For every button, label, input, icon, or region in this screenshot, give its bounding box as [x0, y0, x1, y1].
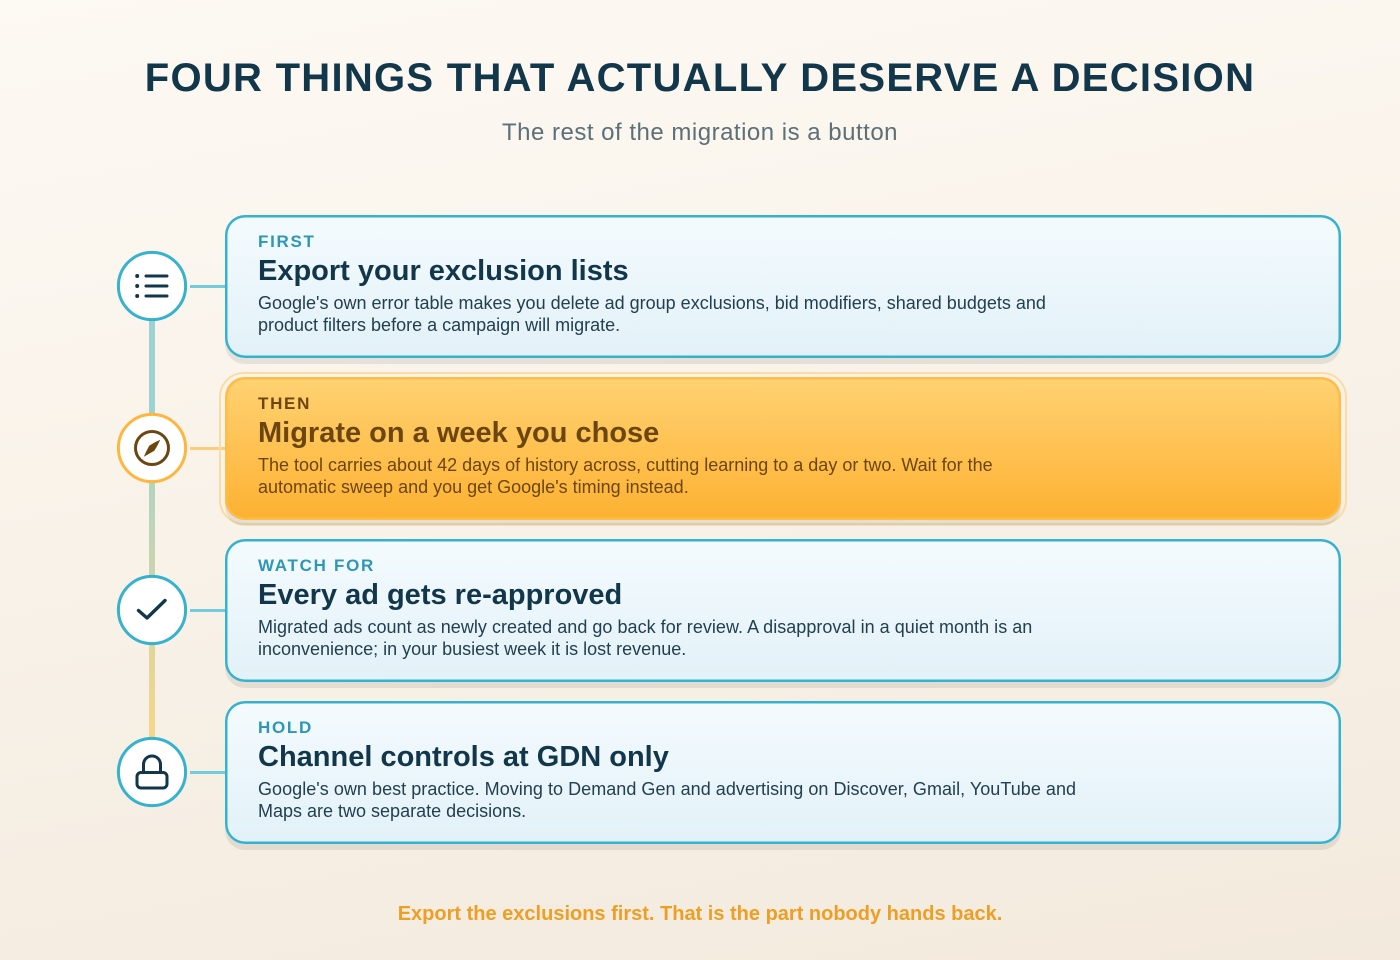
connector: then — [190, 446, 226, 450]
heading: channel controls: Channel controls at GDN only — [258, 741, 669, 773]
subtitle: The rest of the migration is a button — [502, 119, 898, 146]
body: channel controls — [258, 779, 1076, 821]
title: FOUR THINGS THAT ACTUALLY DESERVE A DECISION — [145, 56, 1255, 100]
icon: compass — [116, 412, 188, 484]
body: re-approved: inconvenience; in your busiest week it is lost revenue. — [258, 639, 686, 659]
label: then: THEN — [258, 394, 311, 413]
icon: check — [116, 574, 188, 646]
label: watch for: WATCH FOR — [258, 556, 375, 575]
body: export: product filters before a campaign will migrate. — [258, 315, 620, 335]
card: then — [225, 377, 1341, 520]
label: hold: HOLD — [258, 718, 313, 737]
body: migrate: The tool carries about 42 days of history across, cutting learning to a day or two. Wait for the — [258, 455, 993, 475]
card: hold — [225, 701, 1341, 844]
icon: lock — [116, 736, 188, 808]
heading: re-approved: Every ad gets re-approved — [258, 579, 622, 611]
connector: first — [190, 284, 226, 288]
body: re-approved — [258, 617, 1032, 659]
label: first: FIRST — [258, 232, 316, 251]
body: migrate: automatic sweep and you get Google's timing instead. — [258, 477, 689, 497]
footer callout: Export the exclusions first. That is the part nobody hands back. — [398, 903, 1002, 925]
body: channel controls: Maps are two separate decisions. — [258, 801, 526, 821]
body: channel controls: Google's own best practice. Moving to Demand Gen and advertising on Discover, Gmail, YouTube and — [258, 779, 1076, 799]
body: export: Google's own error table makes you delete ad group exclusions, bid modifiers, shared budgets and — [258, 293, 1046, 313]
heading: export: Export your exclusion lists — [258, 255, 629, 287]
body: export — [258, 293, 1046, 335]
connector: watch for — [190, 608, 226, 612]
connector: hold — [190, 770, 226, 774]
body: re-approved: Migrated ads count as newly created and go back for review. A disapproval in a quiet month is an — [258, 617, 1032, 637]
card: watch for — [225, 539, 1341, 682]
body: migrate — [258, 455, 993, 497]
icon: list — [116, 250, 188, 322]
timeline spine — [149, 286, 155, 772]
card: first — [225, 215, 1341, 358]
heading: migrate: Migrate on a week you chose — [258, 417, 659, 449]
card halo: then — [219, 372, 1347, 525]
